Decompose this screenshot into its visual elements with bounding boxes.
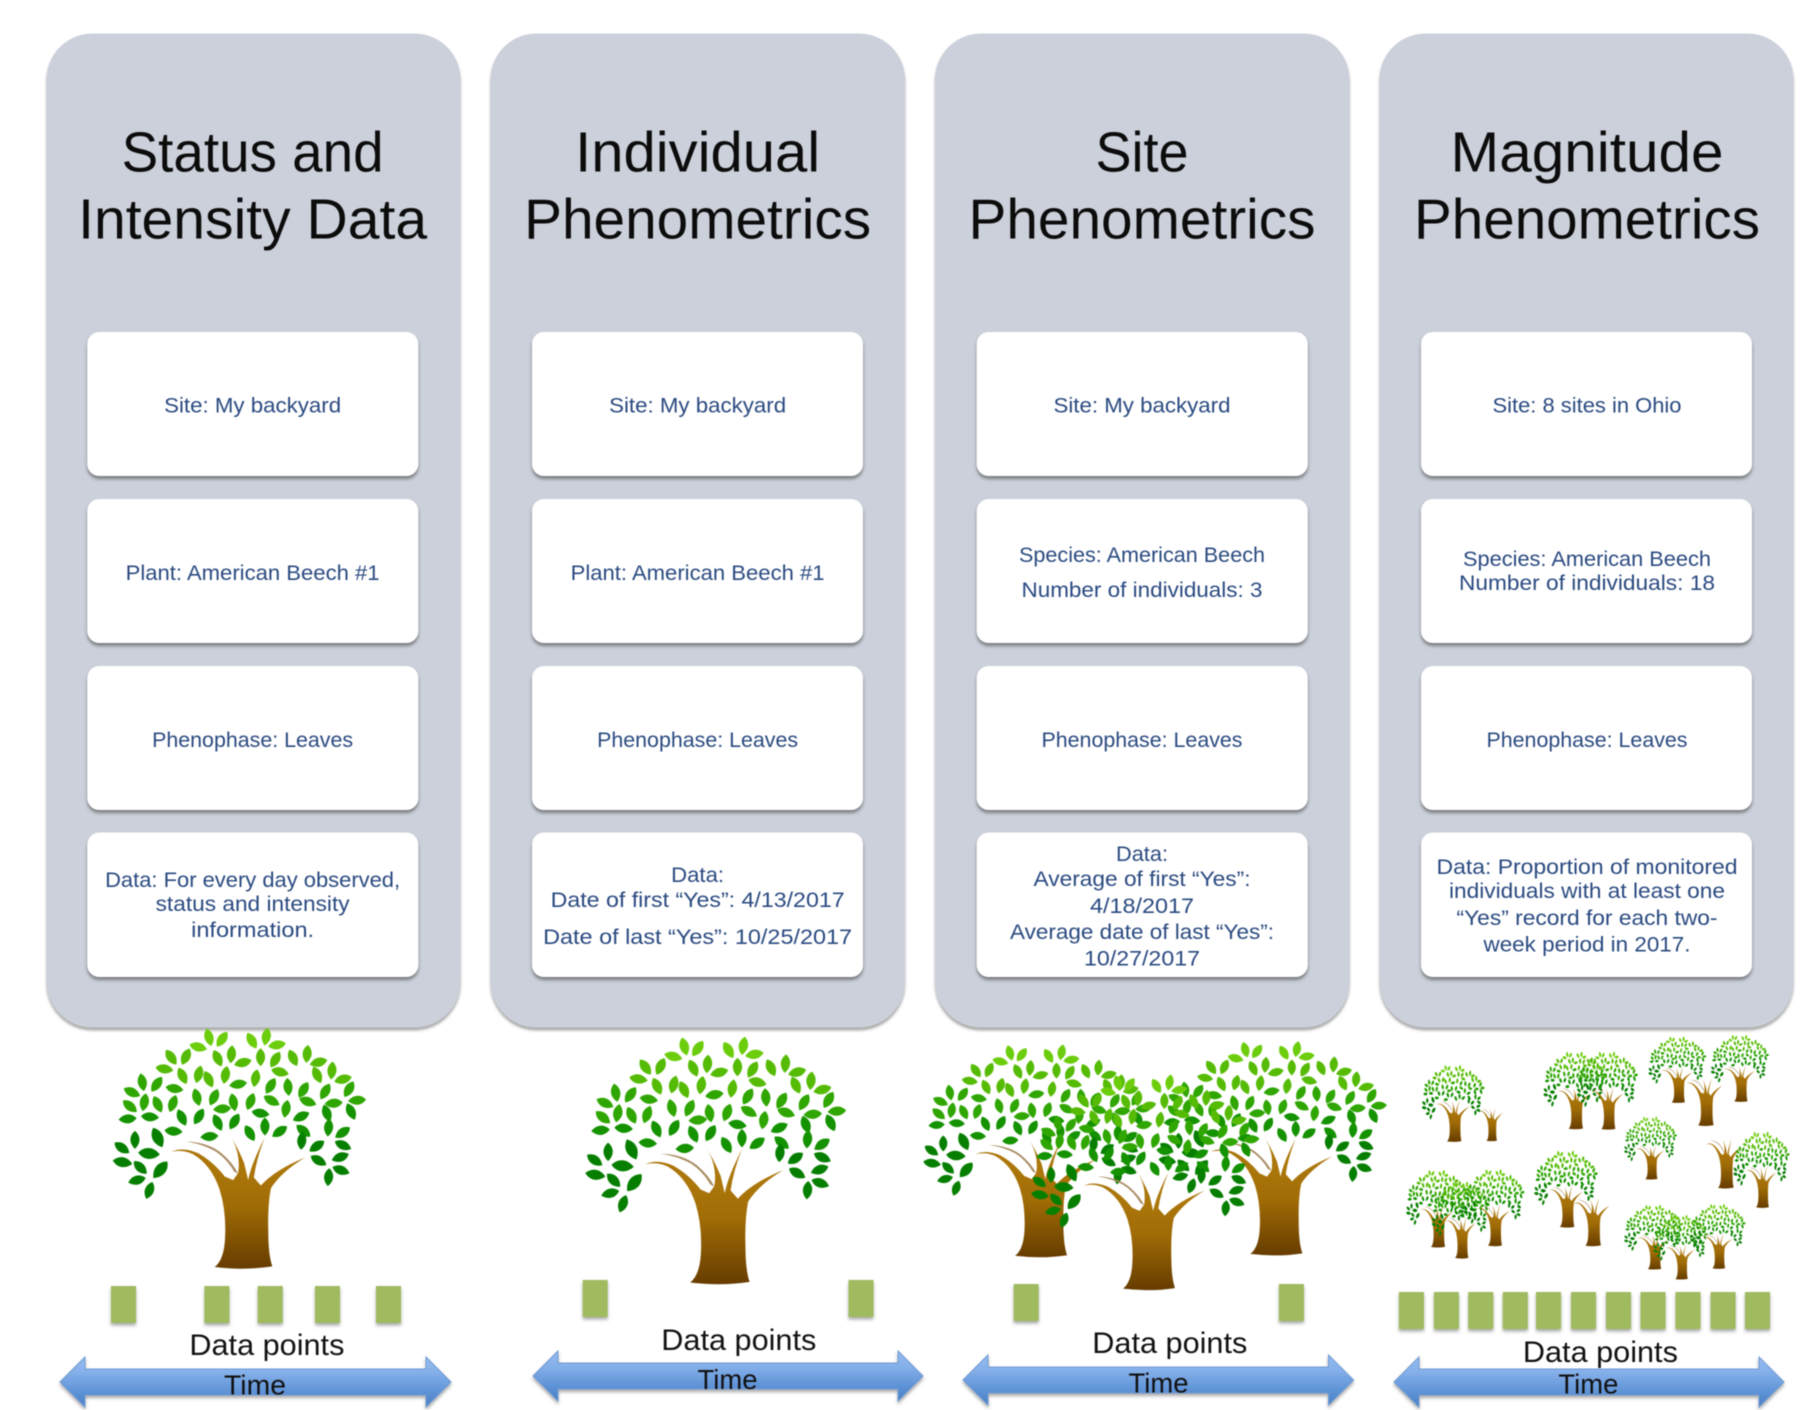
card: species: Number of individuals: 3 <box>1022 579 1262 602</box>
card: data: Average of first “Yes”: <box>1034 868 1250 891</box>
card: data: Data: <box>671 864 724 887</box>
card: site: Site: My backyard <box>1054 394 1230 418</box>
card: phenophase <box>87 666 418 810</box>
heading: Status and Intensity Data: Intensity Data <box>78 188 427 252</box>
card: data <box>1421 832 1752 977</box>
label: data points, column 4: Data points <box>1523 1336 1678 1369</box>
card: phenophase: Phenophase: Leaves <box>152 729 353 752</box>
card: phenophase <box>977 666 1308 810</box>
heading: Site Phenometrics: Phenometrics <box>968 188 1316 252</box>
arrow: time, column 3: Time <box>1128 1368 1188 1398</box>
heading: Site Phenometrics <box>968 120 1316 252</box>
card: phenophase <box>532 666 863 810</box>
panel: Magnitude Phenometrics <box>1380 34 1794 1028</box>
icon: single tree, status and intensity <box>112 1027 366 1269</box>
panel: Individual Phenometrics <box>490 34 905 1028</box>
card: site: Site: My backyard <box>164 394 341 418</box>
data point markers: column 4 <box>1399 1292 1770 1329</box>
card: plant <box>532 499 863 643</box>
card: data: information. <box>191 919 314 942</box>
card: plant: Plant: American Beech #1 <box>126 562 380 585</box>
card: species: Number of individuals: 18 <box>1459 572 1715 595</box>
card: site <box>87 332 418 476</box>
card: data: Average date of last “Yes”: <box>1010 921 1274 944</box>
data point markers: column 1 <box>111 1286 401 1323</box>
card: site <box>977 332 1308 476</box>
card: data: week period in 2017. <box>1482 934 1690 956</box>
card: data <box>532 832 863 977</box>
card: site: Site: 8 sites in Ohio <box>1492 394 1682 418</box>
card: data: Date of first “Yes”: 4/13/2017 <box>551 889 845 912</box>
card: phenophase: Phenophase: Leaves <box>597 729 798 752</box>
card: data: Data: Proportion of monitored <box>1436 856 1738 879</box>
arrow: time, column 1: Time <box>224 1370 286 1400</box>
card: data: Data: <box>1116 843 1168 866</box>
card: phenophase: Phenophase: Leaves <box>1042 729 1242 752</box>
card: data: 4/18/2017 <box>1090 895 1194 918</box>
heading: Individual Phenometrics <box>524 120 871 252</box>
card: plant: Plant: American Beech #1 <box>571 562 825 585</box>
arrow: time, column 3 <box>963 1355 1354 1405</box>
card: data: individuals with at least one <box>1449 880 1725 903</box>
data point markers: column 2 <box>583 1280 874 1317</box>
panel: Status and Intensity Data <box>46 34 460 1028</box>
icon: many small trees, magnitude phenometrics <box>1406 1035 1790 1280</box>
icon: three trees, site phenometrics <box>922 1041 1387 1290</box>
card: site: Site: My backyard <box>609 394 786 418</box>
heading: Individual Phenometrics: Phenometrics <box>524 188 871 252</box>
card: species: Species: American Beech <box>1463 548 1711 571</box>
heading: Magnitude Phenometrics <box>1414 120 1760 252</box>
arrow: time, column 1 <box>60 1357 451 1407</box>
card: phenophase: Phenophase: Leaves <box>1486 729 1688 752</box>
card: site <box>532 332 863 476</box>
label: data points, column 3: Data points <box>1092 1327 1247 1360</box>
arrow: time, column 4 <box>1394 1357 1784 1407</box>
icon: single tree, individual phenometrics <box>584 1036 847 1284</box>
arrow: time, column 2: Time <box>698 1364 758 1395</box>
heading: Site Phenometrics: Site <box>1096 120 1188 184</box>
card: data: status and intensity <box>156 893 350 916</box>
card: data <box>87 832 418 977</box>
heading: Individual Phenometrics: Individual <box>575 120 820 184</box>
panel: Site Phenometrics <box>935 34 1350 1028</box>
card: data: Data: For every day observed, <box>105 869 400 892</box>
label: data points, column 2: Data points <box>661 1324 816 1357</box>
card: species: Species: American Beech <box>1019 544 1265 567</box>
card: plant <box>87 499 418 643</box>
card: phenophase <box>1421 666 1752 810</box>
heading: Magnitude Phenometrics: Magnitude <box>1450 120 1724 184</box>
card: data: 10/27/2017 <box>1084 948 1200 970</box>
card: site <box>1421 332 1752 476</box>
heading: Magnitude Phenometrics: Phenometrics <box>1414 188 1760 252</box>
card: data <box>977 832 1308 977</box>
label: data points, column 1: Data points <box>189 1329 344 1362</box>
card: species <box>1421 499 1752 643</box>
heading: Status and Intensity Data: Status and <box>122 120 384 184</box>
card: data: “Yes” record for each two- <box>1456 907 1718 930</box>
arrow: time, column 2 <box>533 1351 923 1401</box>
data point markers: column 3 <box>1014 1284 1304 1321</box>
card: species <box>977 499 1308 643</box>
card: data: Date of last “Yes”: 10/25/2017 <box>543 926 852 949</box>
arrow: time, column 4: Time <box>1558 1368 1618 1400</box>
heading: Status and Intensity Data <box>78 120 427 252</box>
